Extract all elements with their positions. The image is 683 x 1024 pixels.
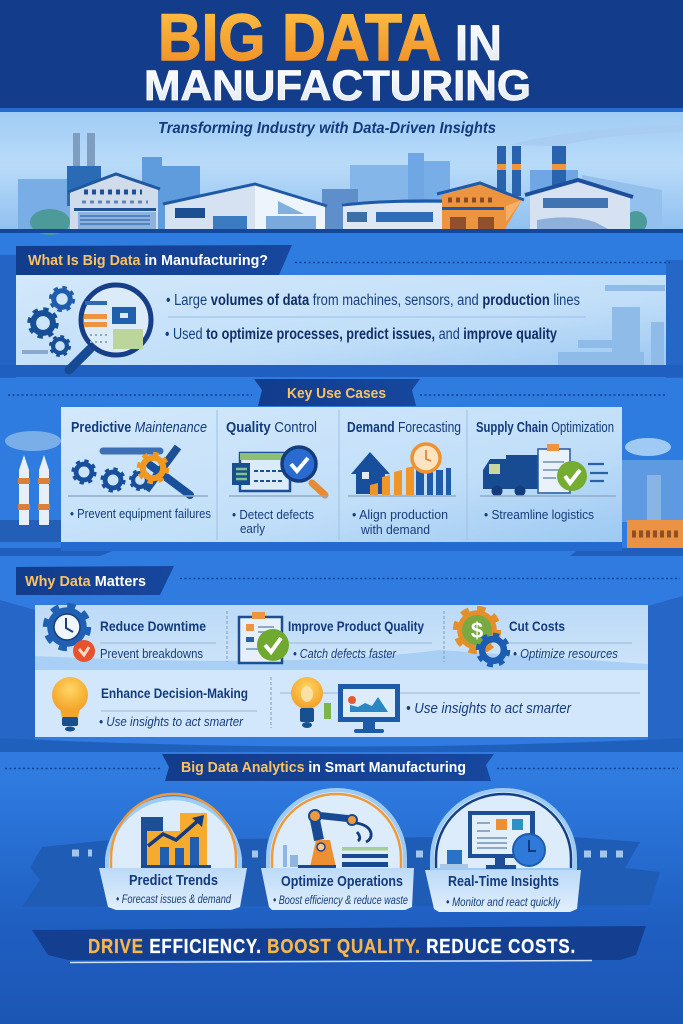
section heading: why data matters: [16, 566, 174, 595]
text: bullet points: • Used to optimize processes, predict issues, and improve quality: [165, 326, 557, 343]
label: real-time insights: [425, 870, 581, 912]
factory silhouette band: [22, 836, 660, 907]
card: optimize operations: [261, 790, 414, 910]
item: reduce downtime: Prevent breakdowns: [100, 646, 203, 661]
text: bullet points: • Large volumes of data from machines, sensors, and production lines: [166, 292, 580, 309]
item: cut costs: $: [471, 618, 483, 643]
section heading: key use cases: Key Use Cases: [287, 385, 386, 402]
title: BIG DATA: [158, 0, 441, 74]
section heading: what is big data: What Is Big Data in Manufacturing?: [28, 252, 268, 269]
panel: key use cases: [61, 407, 622, 542]
card: supply chain optimization: Supply Chain Optimization: [476, 420, 614, 436]
item: enhance decision-making: Enhance Decision-Making: [101, 685, 248, 701]
title: [144, 0, 531, 110]
item: cut costs: [456, 609, 618, 665]
icon: robot arm: [283, 810, 388, 870]
card: predictive maintenance: • Prevent equipment failures: [70, 506, 211, 521]
card: demand forecasting: • Align production: [352, 507, 448, 522]
card: supply chain optimization: • Streamline logistics: [484, 507, 594, 522]
icon: chart and arrow: [141, 813, 211, 869]
item: enhance decision-making: [52, 677, 248, 732]
label: optimize operations: [261, 868, 414, 910]
smokestacks left: [67, 133, 101, 206]
section heading: why data matters: Why Data Matters: [25, 573, 146, 590]
building 2: [163, 184, 327, 229]
factory skyline scene: [0, 108, 683, 235]
section heading: big data analytics: Big Data Analytics in Smart Manufacturing: [181, 760, 466, 776]
icon: gears and magnifier: [22, 285, 151, 370]
label: predict trends: Predict Trends: [129, 872, 218, 889]
smokestacks right: [497, 146, 566, 196]
label: real-time insights: • Monitor and react quickly: [446, 895, 561, 909]
item: cut costs: • Optimize resources: [513, 646, 618, 661]
item: reduce downtime: Reduce Downtime: [100, 618, 206, 634]
icon: monitor and clock: [440, 811, 545, 869]
card: quality control: Quality Control: [226, 420, 317, 436]
section heading: what is big data: [16, 245, 292, 275]
icon: truck and clipboard: [480, 444, 616, 496]
icon: house, bars and clock: [348, 444, 456, 496]
card: demand forecasting: with demand: [360, 522, 430, 537]
label: optimize operations: Optimize Operations: [281, 873, 403, 890]
side shading: [0, 255, 16, 378]
panel: what is big data: [16, 275, 666, 370]
label: predict trends: [99, 868, 247, 910]
side shading: [0, 600, 35, 742]
header band: [0, 0, 683, 109]
card: demand forecasting: Demand Forecasting: [347, 420, 461, 436]
item: insights monitor: [291, 677, 572, 733]
card: quality control: early: [240, 521, 265, 536]
footer banner: DRIVE EFFICIENCY. BOOST QUALITY. REDUCE COSTS.: [88, 936, 576, 958]
footer banner: [32, 926, 646, 962]
item: improve product quality: [239, 612, 424, 663]
icon: gears and wrench: [68, 447, 208, 496]
label: predict trends: • Forecast issues & demand: [116, 892, 231, 906]
item: cut costs: Cut Costs: [509, 618, 565, 634]
icon: quality magnifier: [229, 447, 328, 496]
subtitle: Transforming Industry with Data-Driven Insights: [158, 120, 496, 137]
card: predictive maintenance: [68, 420, 211, 521]
left smokestacks backdrop: [0, 431, 61, 542]
section heading: big data analytics: [162, 754, 494, 781]
item: insights monitor: • Use insights to act smarter: [406, 700, 572, 717]
item: enhance decision-making: • Use insights to act smarter: [99, 714, 244, 729]
card: predict trends: [99, 794, 247, 910]
card: predictive maintenance: Predictive Maintenance: [71, 420, 207, 436]
item: improve product quality: • Catch defects faster: [293, 646, 397, 661]
label: optimize operations: • Boost efficiency & reduce waste: [273, 893, 408, 907]
title: IN: [455, 15, 502, 71]
building 3: [342, 201, 443, 229]
text: bullet points: [165, 292, 586, 343]
building 1: [68, 174, 160, 230]
right backdrop: [622, 438, 683, 548]
card: quality control: • Detect defects: [232, 507, 314, 522]
card: demand forecasting: [347, 420, 461, 537]
title: MANUFACTURING: [144, 62, 531, 110]
building 4: [525, 180, 633, 230]
card: supply chain optimization: [476, 420, 616, 522]
orange building: [437, 183, 524, 230]
label: real-time insights: Real-Time Insights: [448, 873, 559, 890]
section heading: key use cases: [254, 379, 420, 406]
item: improve product quality: Improve Product Quality: [288, 618, 424, 634]
panel: why data matters: [35, 605, 648, 737]
card: real-time insights: [425, 790, 581, 912]
item: reduce downtime: [46, 606, 206, 662]
card: quality control: [226, 420, 328, 536]
